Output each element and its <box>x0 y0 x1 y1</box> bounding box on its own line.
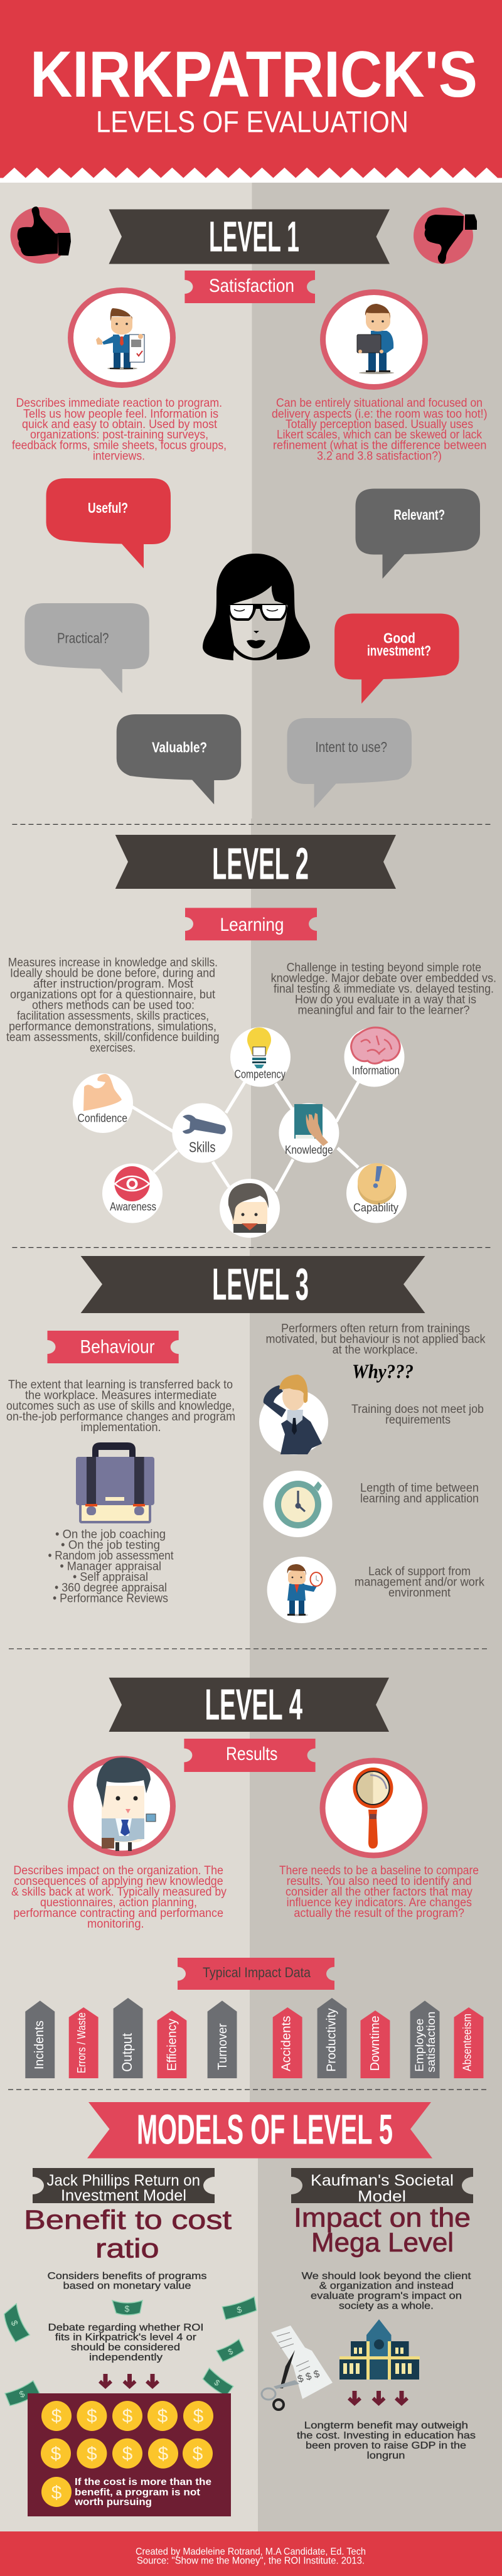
icon: man with clock <box>267 1557 336 1623</box>
impact arrow: accidents: Accidents <box>280 2015 294 2071</box>
ticket: kaufman model: Model <box>358 2188 406 2206</box>
list of behaviour measures: • Self appraisal <box>73 1570 148 1584</box>
impact arrow: employee satisfaction <box>410 2000 439 2078</box>
level 2 challenge text: knowledge. Major debate over embedded vs. <box>271 972 496 985</box>
level 2 challenge text: final testing & immediate vs. delayed testing. <box>274 983 494 996</box>
results ticket <box>184 1739 316 1772</box>
phillips text: debate: fits in Kirkpatrick's level 4 or <box>55 2332 197 2343</box>
impact arrow: absenteeism: Absenteeism <box>461 2014 473 2071</box>
flying money bills: $ <box>236 2304 243 2315</box>
speech bubble: good investment <box>334 614 459 704</box>
learning ticket <box>185 908 317 940</box>
ticket: kaufman model: Kaufman's Societal <box>311 2172 454 2189</box>
coin panel: $ <box>51 2444 61 2464</box>
level 4 baseline text <box>279 1864 479 1920</box>
coin panel: $ <box>193 2444 203 2464</box>
list of behaviour measures: • On the job coaching <box>55 1528 166 1542</box>
flying money bills: $ <box>9 2319 20 2327</box>
coin panel: $ <box>122 2444 133 2464</box>
level 2 challenge text: meaningful and fair to the learner? <box>297 1004 469 1017</box>
level 1 critique text: 3.2 and 3.8 satisfaction?) <box>317 449 442 463</box>
barrier: length of time <box>360 1481 479 1505</box>
impact arrow: absenteeism <box>454 2007 483 2078</box>
impact arrow: downtime: Downtime <box>368 2015 382 2071</box>
level 4 baseline text: actually the result of the program? <box>294 1907 464 1920</box>
icon: man with clipboard <box>70 290 173 385</box>
speech bubble: practical: Practical? <box>57 630 109 647</box>
list of behaviour measures: • 360 degree appraisal <box>55 1582 167 1594</box>
coin panel caption: benefit, a program is not <box>75 2487 201 2498</box>
speech bubble: valuable <box>117 714 241 805</box>
ticket: jack phillips model: Investment Model <box>61 2187 186 2204</box>
icon: exclamation disc <box>358 1163 396 1205</box>
level 1 ribbon: LEVEL 1 <box>209 212 299 260</box>
level 4 description: consequences of applying new knowledge <box>14 1875 223 1888</box>
icon: book and hand <box>294 1104 328 1146</box>
level 4 baseline text: consider all the other factors that may <box>286 1886 473 1899</box>
level 1 critique text: Likert scales, which can be skewed or lack <box>277 429 482 442</box>
heading: benefit to cost ratio: ratio <box>95 2233 159 2263</box>
phillips text: monetary value: based on monetary value <box>63 2281 191 2292</box>
arrows down to longterm benefit <box>348 2391 409 2406</box>
flying money bills: $ <box>227 2346 235 2357</box>
level 1 critique text: refinement (what is the difference between <box>273 439 487 452</box>
ticket: jack phillips model <box>33 2168 215 2204</box>
learning ticket: Learning <box>220 915 284 935</box>
flying money bills: $ <box>124 2304 129 2314</box>
kaufman text: societal impact <box>302 2271 471 2311</box>
level 1 positive text: Describes immediate reaction to program. <box>16 397 222 410</box>
icon: eye <box>114 1166 149 1201</box>
level 4 baseline text: There needs to be a baseline to compare <box>279 1864 479 1877</box>
level 2 challenge text <box>271 962 496 1017</box>
level 1 positive text: quick and easy to obtain. Used by most <box>22 418 218 431</box>
icon: scissors cutting receipt <box>262 2326 333 2410</box>
level 1 critique text: Can be entirely situational and focused on <box>276 397 483 410</box>
why heading: Why??? <box>352 1360 414 1383</box>
kaufman text: longterm benefit: the cost. Investing in education has <box>297 2430 476 2441</box>
kaufman text: societal impact: evaluate program's impact on <box>311 2291 462 2302</box>
node labels: Skills <box>189 1139 215 1156</box>
list of behaviour measures <box>48 1528 174 1606</box>
impact arrow: turnover: Turnover <box>216 2023 230 2070</box>
icon: wrench <box>183 1115 226 1134</box>
level 1 critique text: Totally perception based. Usually uses <box>286 418 473 431</box>
level 2 description: others methods can be used too: <box>32 999 195 1012</box>
icon: thumbs down <box>414 207 477 264</box>
phillips text: monetary value <box>48 2271 207 2292</box>
icon: confused woman <box>259 1375 328 1455</box>
heading: impact on the mega level: Impact on the <box>294 2203 471 2233</box>
impact arrow: efficiency <box>157 2010 186 2078</box>
kaufman text: societal impact: & organization and instead <box>319 2281 454 2292</box>
level 2 description: Measures increase in knowledge and skills. <box>8 957 218 970</box>
impact arrow: downtime <box>360 2010 390 2078</box>
satisfaction ticket: Satisfaction <box>209 276 294 296</box>
node labels <box>78 1065 400 1214</box>
behaviour ticket: Behaviour <box>80 1336 155 1357</box>
impact arrow: turnover <box>208 2000 237 2078</box>
coin panel: $ <box>122 2406 133 2427</box>
icon: briefcase <box>76 1442 154 1523</box>
impact arrow: output: Output <box>119 2033 135 2072</box>
impact arrow: accidents <box>273 2007 302 2078</box>
impact arrow: employee satisfaction: satisfaction <box>425 2012 437 2073</box>
speech bubble: intent to use: Intent to use? <box>315 739 387 755</box>
coin panel caption: If the cost is more than the <box>75 2477 211 2487</box>
list of behaviour measures: • Manager appraisal <box>60 1560 161 1573</box>
impact arrow: output <box>114 1998 143 2078</box>
level 4 description: questionnaires, action planning, <box>40 1896 197 1909</box>
divider <box>9 1648 490 1650</box>
impact arrow: employee satisfaction: Employee <box>413 2019 425 2072</box>
coin panel caption: worth pursuing <box>74 2497 152 2508</box>
level 1 positive text: organizations: post-training surveys, <box>30 429 208 442</box>
results ticket: Results <box>226 1744 277 1764</box>
level 3 right text <box>266 1322 486 1356</box>
list of behaviour measures: • Performance Reviews <box>53 1592 168 1606</box>
icon: man with tablet <box>323 292 425 387</box>
icon: flexed arm <box>83 1074 122 1111</box>
footer: Source: "Show me the Money", the ROI Institute. 2013. <box>137 2556 365 2567</box>
icon: cartoon manager <box>70 1758 173 1854</box>
typical impact data ticket <box>178 1958 334 1990</box>
divider <box>12 824 493 825</box>
level 3 description: The extent that learning is transferred back to <box>8 1378 233 1392</box>
coin panel <box>28 2393 231 2516</box>
list of behaviour measures: • Random job assessment <box>48 1550 174 1563</box>
speech bubble: relevant <box>355 488 480 579</box>
icon: magnifying glass <box>323 1761 425 1855</box>
impact arrow: productivity: Productivity <box>325 2008 339 2072</box>
level 4 ribbon: LEVEL 4 <box>205 1680 302 1729</box>
icon: thumbs up <box>10 207 71 264</box>
icon: scissors cutting receipt: $ $ $ <box>296 2369 321 2385</box>
impact arrow: incidents <box>25 2000 55 2078</box>
level 4 description: performance contracting and performance <box>13 1907 223 1920</box>
level 3 description: outcomes such as use of skills and knowledge, <box>6 1400 235 1413</box>
level 3 description: on-the-job performance changes and program <box>6 1410 235 1424</box>
level 2 description: organizations opt for a questionnaire, but <box>10 989 216 1002</box>
behaviour ticket <box>48 1331 179 1363</box>
impact arrow: errors and waste: Errors / Waste <box>75 2012 88 2073</box>
phillips text: debate <box>48 2322 203 2363</box>
footer <box>0 2531 502 2576</box>
heading: benefit to cost ratio: Benefit to cost <box>24 2205 232 2235</box>
level 1 positive text <box>12 397 227 463</box>
impact arrow: incidents: Incidents <box>33 2021 46 2069</box>
kaufman text: longterm benefit <box>297 2420 476 2461</box>
level 3 ribbon: LEVEL 3 <box>212 1260 309 1309</box>
impact arrow: productivity <box>318 1998 346 2078</box>
level 2 description: Ideally should be done before, during and <box>10 967 215 980</box>
icon: building <box>339 2319 420 2380</box>
flying money bills: $ <box>18 2388 26 2400</box>
coin panel: $ <box>158 2444 169 2464</box>
barrier: job requirements <box>351 1403 484 1427</box>
level 1 critique text <box>272 397 487 463</box>
level 4 baseline text: influence key indicators. Are changes <box>287 1896 472 1909</box>
node labels: Awareness <box>110 1200 156 1213</box>
heading: benefit to cost ratio <box>24 2205 232 2263</box>
level 2 description: exercises. <box>90 1041 136 1055</box>
kaufman text: longterm benefit: Longterm benefit may outweigh <box>304 2420 468 2431</box>
divider <box>12 1247 493 1248</box>
ticket: kaufman model <box>291 2168 473 2206</box>
arrows down to coins <box>99 2374 159 2389</box>
barrier: length of time: learning and application <box>360 1492 479 1505</box>
kaufman text: longterm benefit: been proven to raise GDP in the <box>306 2440 466 2451</box>
level 3 ribbon <box>81 1256 425 1313</box>
level 3 right text: Performers often return from trainings <box>281 1322 470 1335</box>
level 3 right text: at the workplace. <box>333 1343 418 1356</box>
level 3 right text: motivated, but behaviour is not applied back <box>266 1333 486 1346</box>
barrier: lack of support: Lack of support from <box>368 1565 471 1578</box>
level 2 ribbon <box>115 835 396 889</box>
node labels: Competency <box>235 1068 286 1080</box>
level 4 baseline text: results. You also need to identify and <box>287 1875 472 1888</box>
satisfaction ticket <box>184 271 315 303</box>
heading: impact on the mega level <box>294 2203 471 2258</box>
phillips text: debate: Debate regarding whether ROI <box>48 2322 203 2333</box>
models of level 5 ribbon <box>87 2102 432 2158</box>
ticket: jack phillips model: Jack Phillips Return on <box>46 2172 200 2189</box>
flying money bills: $ <box>212 2378 222 2388</box>
level 2 challenge text: Challenge in testing beyond simple rote <box>287 962 481 975</box>
barrier: lack of support: management and/or work <box>355 1575 484 1589</box>
icon: brain <box>351 1028 400 1063</box>
speech bubble: practical <box>24 603 149 693</box>
subtitle: LEVELS OF EVALUATION <box>96 106 409 139</box>
speech bubble: good investment: investment? <box>367 642 431 658</box>
coin panel: $ <box>87 2444 97 2464</box>
kaufman text: longterm benefit: longrun <box>367 2450 405 2461</box>
level 1 ribbon <box>109 210 390 264</box>
impact arrow: errors and waste <box>69 2007 99 2078</box>
coin panel: $ <box>193 2406 204 2427</box>
impact arrow: efficiency: Efficiency <box>166 2019 179 2071</box>
typical impact data ticket: Typical Impact Data <box>203 1965 311 1980</box>
node labels: Confidence <box>78 1112 127 1125</box>
list of behaviour measures: • On the job testing <box>61 1539 160 1552</box>
level 1 positive text: feedback forms, smile sheets, focus groups, <box>12 439 227 452</box>
level 3 description: implementation. <box>81 1421 161 1434</box>
phillips text: debate: independently <box>89 2353 163 2363</box>
barrier: lack of support <box>355 1565 484 1599</box>
icon: person face <box>228 1183 269 1233</box>
barrier: lack of support: environment <box>388 1586 451 1599</box>
speech bubble: intent to use <box>287 718 412 808</box>
coin panel caption <box>74 2477 211 2508</box>
speech bubble: good investment: Good <box>383 630 415 647</box>
flying money bills <box>1 2297 258 2407</box>
speech bubble: useful: Useful? <box>88 500 128 516</box>
header banner <box>0 0 502 183</box>
level 2 description <box>6 957 220 1055</box>
kaufman text: societal impact: We should look beyond the client <box>302 2271 471 2282</box>
icon: woman with glasses <box>203 554 310 660</box>
level 4 description <box>11 1864 227 1931</box>
level 2 description: team assessments, skill/confidence building <box>6 1031 220 1044</box>
speech bubble: useful <box>46 478 171 569</box>
coin panel: $ <box>51 2406 62 2427</box>
level 3 description: the workplace. Measures intermediate <box>25 1389 216 1402</box>
node labels: Knowledge <box>285 1144 333 1156</box>
barrier: length of time: Length of time between <box>360 1481 479 1495</box>
speech bubble: valuable: Valuable? <box>152 739 207 755</box>
phillips text: debate: should be considered <box>71 2343 180 2353</box>
level 4 description: monitoring. <box>87 1918 144 1931</box>
level 2 description: facilitation assessments, skills practices, <box>17 1009 209 1023</box>
kaufman text: societal impact: society as a whole. <box>339 2300 434 2311</box>
coin panel: $ <box>51 2482 62 2503</box>
footer: Created by Madeleine Rotrand, M.A Candidate, Ed. Tech <box>136 2546 366 2557</box>
level 1 positive text: Tells us how people feel. Information is <box>23 408 218 421</box>
level 2 challenge text: How do you evaluate in a way that is <box>295 994 476 1007</box>
speech bubble: relevant: Relevant? <box>394 507 445 523</box>
level 1 positive text: interviews. <box>93 449 145 463</box>
level 2 description: after instruction/program. Most <box>33 978 194 991</box>
level 4 description: & skills back at work. Typically measured by <box>11 1886 227 1899</box>
divider <box>8 2089 488 2090</box>
coin panel: $ <box>158 2406 168 2427</box>
level 2 description: performance demonstrations, simulations, <box>9 1021 216 1033</box>
icon: light bulb <box>247 1028 271 1068</box>
network diagram of skills and knowledge <box>73 1027 407 1238</box>
barrier: job requirements: Training does not meet job <box>351 1403 484 1416</box>
heading: impact on the mega level: Mega Level <box>311 2228 454 2258</box>
level 3 description <box>6 1378 235 1434</box>
level 4 description: Describes impact on the organization. The <box>13 1864 223 1877</box>
node labels: Information <box>352 1065 400 1077</box>
phillips text: monetary value: Considers benefits of programs <box>48 2271 207 2282</box>
coin panel: $ <box>87 2406 97 2427</box>
level 1 critique text: delivery aspects (i.e: the room was too hot!) <box>272 408 487 421</box>
node labels: Capability <box>353 1201 398 1214</box>
icon: stopwatch <box>264 1471 333 1537</box>
level 4 ribbon <box>109 1678 389 1732</box>
barrier: job requirements: requirements <box>385 1414 451 1427</box>
level 2 ribbon: LEVEL 2 <box>212 839 309 889</box>
